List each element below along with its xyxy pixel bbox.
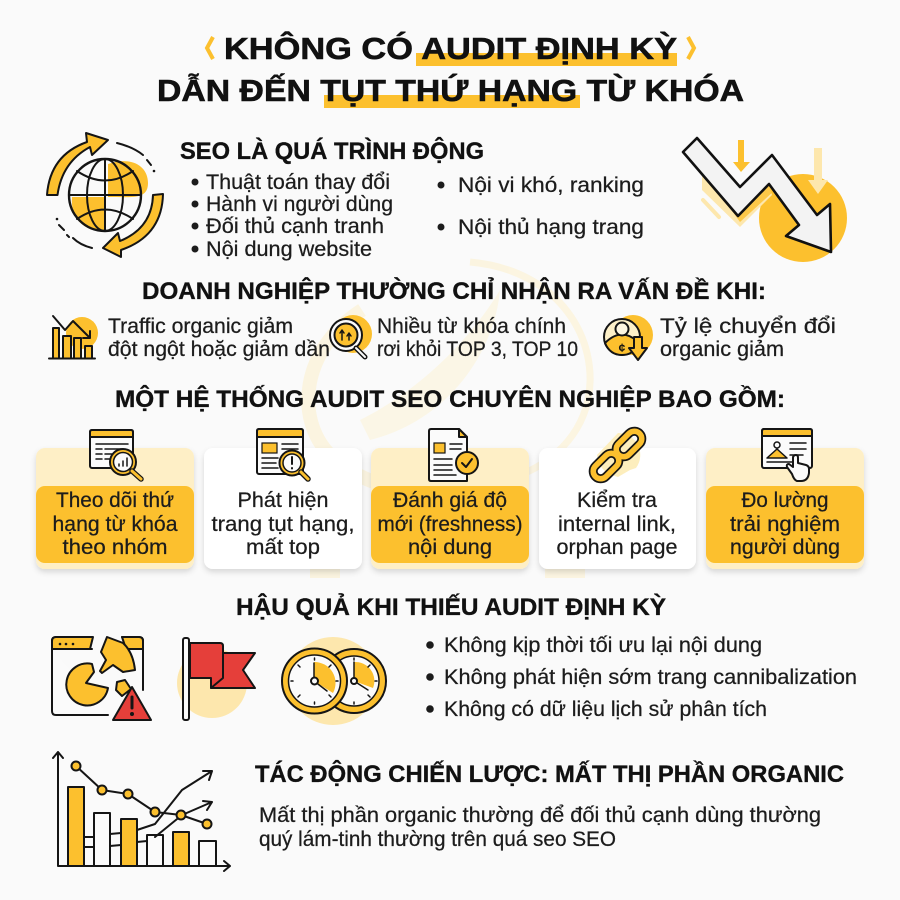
card 5: do luong trai nghiem (706, 429, 864, 569)
card 1: theo doi thu hang: hạng từ khóa (52, 513, 178, 536)
list: SEO factors: Nội thủ hạng trang (458, 216, 644, 239)
card 5: do luong trai nghiem: trải nghiệm (730, 513, 840, 536)
item: traffic organic giam (49, 315, 330, 361)
item: tu khoa roi top (330, 315, 578, 361)
card 2: phat hien trang tut hang (204, 429, 362, 569)
card 1: theo doi thu hang: theo nhóm (62, 536, 168, 559)
heading: he thong audit: MỘT HỆ THỐNG AUDIT SEO CHUYÊN NGHIỆP BAO GỒM: (115, 385, 785, 413)
item: traffic organic giam: đột ngột hoặc giảm dần (108, 338, 330, 361)
icon: document check (429, 429, 478, 481)
title chevrons (207, 37, 694, 59)
card 1: theo doi thu hang: Theo dõi thứ (56, 489, 174, 512)
card 2: phat hien trang tut hang: trang tụt hạng, (212, 513, 354, 536)
icon: magnifier (330, 315, 372, 357)
icon: broken chart window (52, 637, 151, 720)
icon: conversion person: ¢ (619, 341, 626, 355)
icon: report magnifier (90, 430, 141, 479)
card 4: kiem tra internal link: orphan page (556, 536, 678, 559)
list: consequences: Không phát hiện sớm trang cannibalization (444, 666, 857, 689)
list: SEO factors (192, 171, 644, 261)
item: ty le chuyen doi: Tỷ lệ chuyển đổi (660, 315, 836, 338)
icon: chain link (590, 428, 645, 482)
title: DẪN ĐẾN TỤT THỨ HẠNG TỪ KHÓA (157, 72, 744, 108)
card 4: kiem tra internal link (539, 428, 696, 569)
card 4: kiem tra internal link: internal link, (558, 513, 676, 536)
card 3: danh gia do moi: nội dung (408, 536, 492, 559)
card 3: danh gia do moi: mới (freshness) (378, 513, 522, 536)
icon: globe with rotating arrows (47, 133, 163, 257)
text block: impact description: Mất thị phần organic thường để đối thủ cạnh dùng thường (259, 804, 821, 827)
list: SEO factors: Nội dung website (206, 238, 372, 261)
icon: falling arrow (683, 138, 847, 262)
title (157, 30, 744, 108)
card 4: kiem tra internal link: Kiểm tra (577, 489, 657, 512)
text block: impact description: quý lám-tinh thường trên quá seo SEO (259, 828, 616, 851)
item: ty le chuyen doi: organic giảm (660, 338, 784, 361)
icon: red flag (177, 638, 255, 720)
card 2: phat hien trang tut hang: mất top (246, 536, 320, 559)
card 5: do luong trai nghiem: Đo lường (742, 489, 828, 512)
watermark logo (308, 262, 590, 572)
icon: page alert magnifier (257, 429, 308, 479)
icon: window with pointer hand (762, 429, 812, 481)
heading: doanh nghiep: DOANH NGHIỆP THƯỜNG CHỈ NHẬN RA VẤN ĐỀ KHI: (142, 276, 766, 305)
item: tu khoa roi top: rơi khỏi TOP 3, TOP 10 (377, 338, 578, 361)
list: SEO factors: Thuật toán thay đổi (206, 171, 390, 194)
list: SEO factors: Đối thủ cạnh tranh (206, 215, 384, 238)
list: consequences: Không có dữ liệu lịch sử phân tích (444, 698, 767, 721)
icon: conversion person (604, 315, 653, 360)
list: SEO factors: Nội vi khó, ranking (458, 174, 644, 197)
text block: impact description (259, 804, 821, 851)
icon: falling bar chart (49, 316, 98, 358)
card 5: do luong trai nghiem: người dùng (730, 536, 840, 559)
heading: SEO la qua trinh dong: SEO LÀ QUÁ TRÌNH ĐỘNG (180, 137, 484, 165)
card 1: theo doi thu hang (36, 430, 194, 569)
list: consequences: Không kịp thời tối ưu lại nội dung (444, 634, 762, 657)
card 3: danh gia do moi: Đánh giá độ (393, 489, 507, 512)
heading: tac dong chien luoc: TÁC ĐỘNG CHIẾN LƯỢC: MẤT THỊ PHẦN ORGANIC (255, 760, 844, 788)
item: tu khoa roi top: Nhiều từ khóa chính (377, 315, 566, 338)
item: traffic organic giam: Traffic organic giảm (108, 315, 293, 338)
title highlight bars (324, 53, 677, 108)
card 2: phat hien trang tut hang: Phát hiện (238, 489, 328, 512)
item: ty le chuyen doi (604, 315, 836, 361)
heading: hau qua: HẬU QUẢ KHI THIẾU AUDIT ĐỊNH KỲ (236, 592, 666, 621)
list: consequences (426, 634, 857, 721)
icon: two clocks (282, 637, 386, 725)
card 3: danh gia do moi (371, 429, 529, 569)
icon: market share chart (53, 752, 230, 871)
title: KHÔNG CÓ AUDIT ĐỊNH KỲ (224, 30, 677, 66)
list: SEO factors: Hành vi người dùng (206, 193, 393, 216)
